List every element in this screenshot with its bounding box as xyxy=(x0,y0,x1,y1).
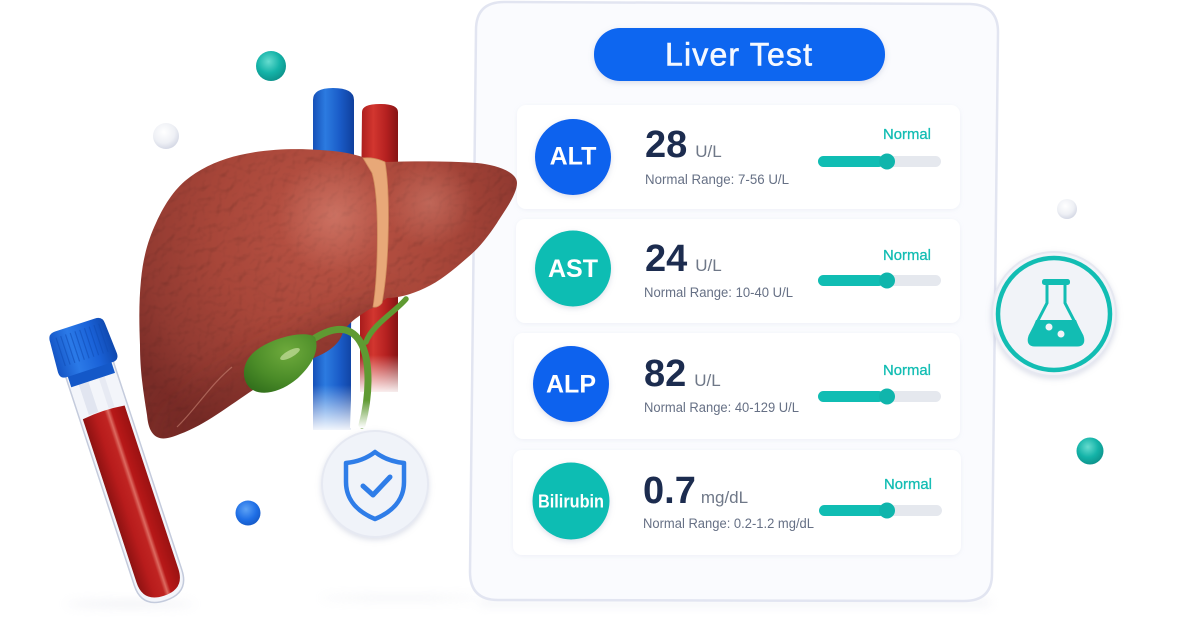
value: 82 U/L: 82 U/L xyxy=(644,353,721,395)
flask badge xyxy=(992,252,1116,376)
normal range: ALP: Normal Range: 40-129 U/L xyxy=(644,400,799,415)
status: Normal: Normal xyxy=(883,248,931,264)
blood xyxy=(82,404,185,603)
status: Normal: Normal xyxy=(883,363,931,379)
floor shadow xyxy=(65,596,990,607)
test results panel xyxy=(470,2,998,601)
value: 28 U/L: 28 U/L xyxy=(645,124,722,166)
status: Normal: Normal xyxy=(884,477,932,493)
slider: ALP xyxy=(818,388,941,404)
status: Normal: Normal xyxy=(883,127,931,143)
normal range: AST: Normal Range: 10-40 U/L xyxy=(644,285,793,300)
decorative spheres xyxy=(153,51,1104,526)
slider: AST xyxy=(818,272,941,288)
icon: shield check xyxy=(346,452,404,519)
row: Bilirubin xyxy=(513,450,961,555)
tube glass xyxy=(64,355,189,608)
badge: Bilirubin: Bilirubin xyxy=(538,492,604,512)
value: 0.7 mg/dL: 0.7 mg/dL xyxy=(643,470,748,512)
row: AST xyxy=(516,219,960,323)
badge: ALT: ALT xyxy=(550,142,596,170)
liver xyxy=(139,149,517,438)
cap xyxy=(46,315,123,390)
gallbladder xyxy=(244,334,316,393)
test tube with blood xyxy=(46,315,195,610)
badge: ALP: ALP xyxy=(546,370,596,398)
falciform ligament band xyxy=(363,158,388,307)
normal range: ALT: Normal Range: 7-56 U/L xyxy=(645,172,789,187)
slider: Bilirubin xyxy=(819,502,942,518)
blood vessels xyxy=(308,88,402,433)
slider: ALT xyxy=(818,154,941,170)
normal range: Bilirubin: Normal Range: 0.2-1.2 mg/dL xyxy=(643,516,814,531)
value: 24 U/L: 24 U/L xyxy=(645,238,722,280)
badge: ALP xyxy=(533,346,609,422)
bile duct xyxy=(315,299,406,428)
heading: Liver Test xyxy=(594,28,885,81)
heading: Liver Test: Liver Test xyxy=(665,36,812,72)
badge: AST xyxy=(535,230,611,306)
badge: AST: AST xyxy=(548,255,598,283)
badge: Bilirubin xyxy=(532,462,610,540)
icon: flask xyxy=(1029,279,1083,346)
row: ALT xyxy=(517,105,960,209)
row: ALP xyxy=(514,333,960,439)
shield badge xyxy=(322,431,428,537)
badge: ALT xyxy=(535,119,611,195)
